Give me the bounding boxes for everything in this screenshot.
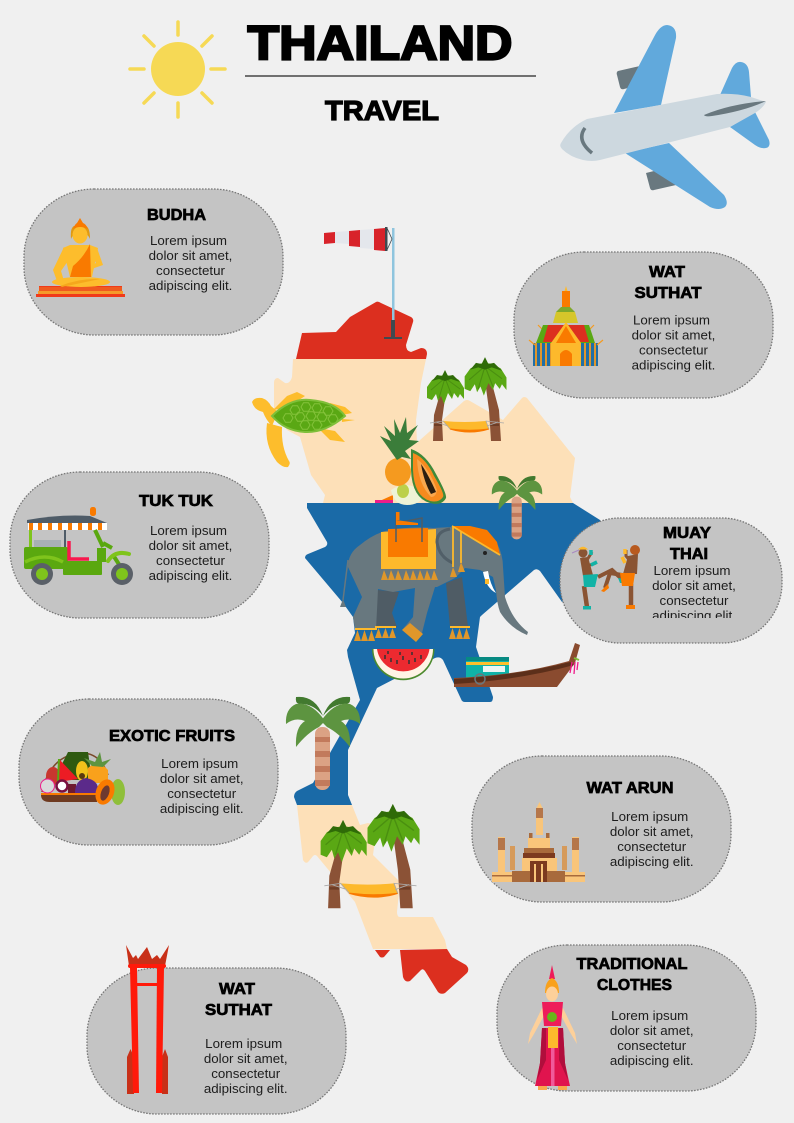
text: tuk tuk description: Lorem ipsum [150,523,227,538]
text: muay thai description [652,566,735,618]
text: budha description: Lorem ipsum [150,233,227,248]
text: wat suthat description: dolor sit amet, [632,328,715,342]
icon: sun [130,22,225,117]
text: wat arun description: adipiscing elit. [610,854,694,869]
heading: traditional clothes: TRADITIONAL [576,956,688,973]
heading: exotic fruits: EXOTIC FRUITS [109,728,235,745]
icon: tuk tuk vehicle [24,507,133,585]
panel: tuk tuk [10,472,269,618]
title divider [245,75,536,77]
map: southern red band [375,949,468,994]
panel: traditional clothes [497,945,756,1091]
icon: fruit basket [40,752,125,807]
icon: long-tail boat [454,643,580,687]
panel: exotic fruits [19,699,278,845]
panel: wat arun [472,756,731,902]
icon: fruits pineapple and papaya [375,417,446,505]
map: central blue band [294,503,620,805]
icon: palm tree large [286,697,360,790]
heading: wat arun: WAT ARUN [586,780,674,797]
heading: muay thai: THAI [670,546,708,563]
icon: buddha statue [36,218,125,297]
icon: airplane [560,25,770,209]
heading: wat suthat: WAT [649,264,686,281]
text: budha description: adipiscing elit. [149,278,232,293]
text: muay thai description: consectetur [660,593,729,608]
heading: budha: BUDHA [147,207,206,224]
panel: wat suthat bottom [87,945,346,1114]
title: THAILAND [248,18,512,70]
text: wat suthat description: adipiscing elit. [632,358,715,372]
heading: wat suthat: SUTHAT [634,285,702,302]
text: muay thai description: Lorem ipsum [653,563,731,578]
text: tuk tuk description: consectetur [156,553,226,568]
text: wat arun description: consectetur [617,839,687,854]
icon: elephant [340,512,528,642]
map: northern peach band [274,359,575,503]
icon: watermelon slice [372,649,434,680]
heading: wat suthat: SUTHAT [205,1002,273,1019]
text: traditional clothes description: adipiscing elit. [610,1053,694,1068]
icon: palm tree small [492,476,542,539]
text: exotic fruits description: adipiscing elit. [160,801,244,816]
text: wat suthat description: consectetur [639,342,709,358]
text: tuk tuk description: adipiscing elit. [149,568,232,583]
heading: traditional clothes: CLOTHES [597,977,672,994]
icon: windsock flag [324,227,402,339]
map: southern peach band [297,805,447,949]
text: traditional clothes description: Lorem ipsum [611,1008,688,1023]
text: tuk tuk description: dolor sit amet, [149,538,232,553]
panel: budha [24,189,283,335]
text: exotic fruits description: Lorem ipsum [161,756,238,771]
text: wat suthat description: Lorem ipsum [633,312,710,328]
panel: muay thai [560,518,782,643]
heading: muay thai: MUAY [663,525,712,542]
text: muay thai description: adipiscing elit. [652,608,736,623]
map of Thailand [274,302,620,994]
text: budha description: dolor sit amet, [149,248,232,263]
text: wat suthat description: adipiscing elit. [204,1081,288,1096]
heading: tuk tuk: TUK TUK [139,493,214,510]
text: traditional clothes description: consectetur [617,1038,687,1053]
heading: traditional clothes [576,956,688,994]
icon: wat arun temple [492,802,585,882]
icon: thai dancer [528,965,577,1090]
icon: palms and hammock north [427,357,506,441]
heading: wat suthat: WAT [219,981,256,998]
subtitle: TRAVEL [325,95,439,126]
text: wat arun description: dolor sit amet, [610,824,694,839]
text: wat suthat description: dolor sit amet, [204,1051,288,1066]
text: budha description: consectetur [156,263,226,278]
text: wat suthat description: Lorem ipsum [205,1036,282,1051]
heading: wat suthat [634,264,702,302]
text: exotic fruits description: consectetur [167,786,237,801]
panel: wat suthat top right [514,252,773,398]
icon: giant swing [126,945,169,1094]
icon: temple [529,286,603,366]
text: wat suthat description: consectetur [211,1066,281,1081]
map: northern red band [296,302,427,359]
icon: turtle [252,392,355,467]
icon: muay thai fighters [572,545,640,610]
text: traditional clothes description: dolor sit amet, [610,1023,694,1038]
text: muay thai description: dolor sit amet, [652,578,736,593]
text: wat arun description: Lorem ipsum [611,809,688,824]
heading: wat suthat [205,981,273,1019]
text: exotic fruits description: dolor sit amet, [160,771,244,786]
icon: palms and hammock south [321,804,420,908]
heading: muay thai [663,525,712,563]
